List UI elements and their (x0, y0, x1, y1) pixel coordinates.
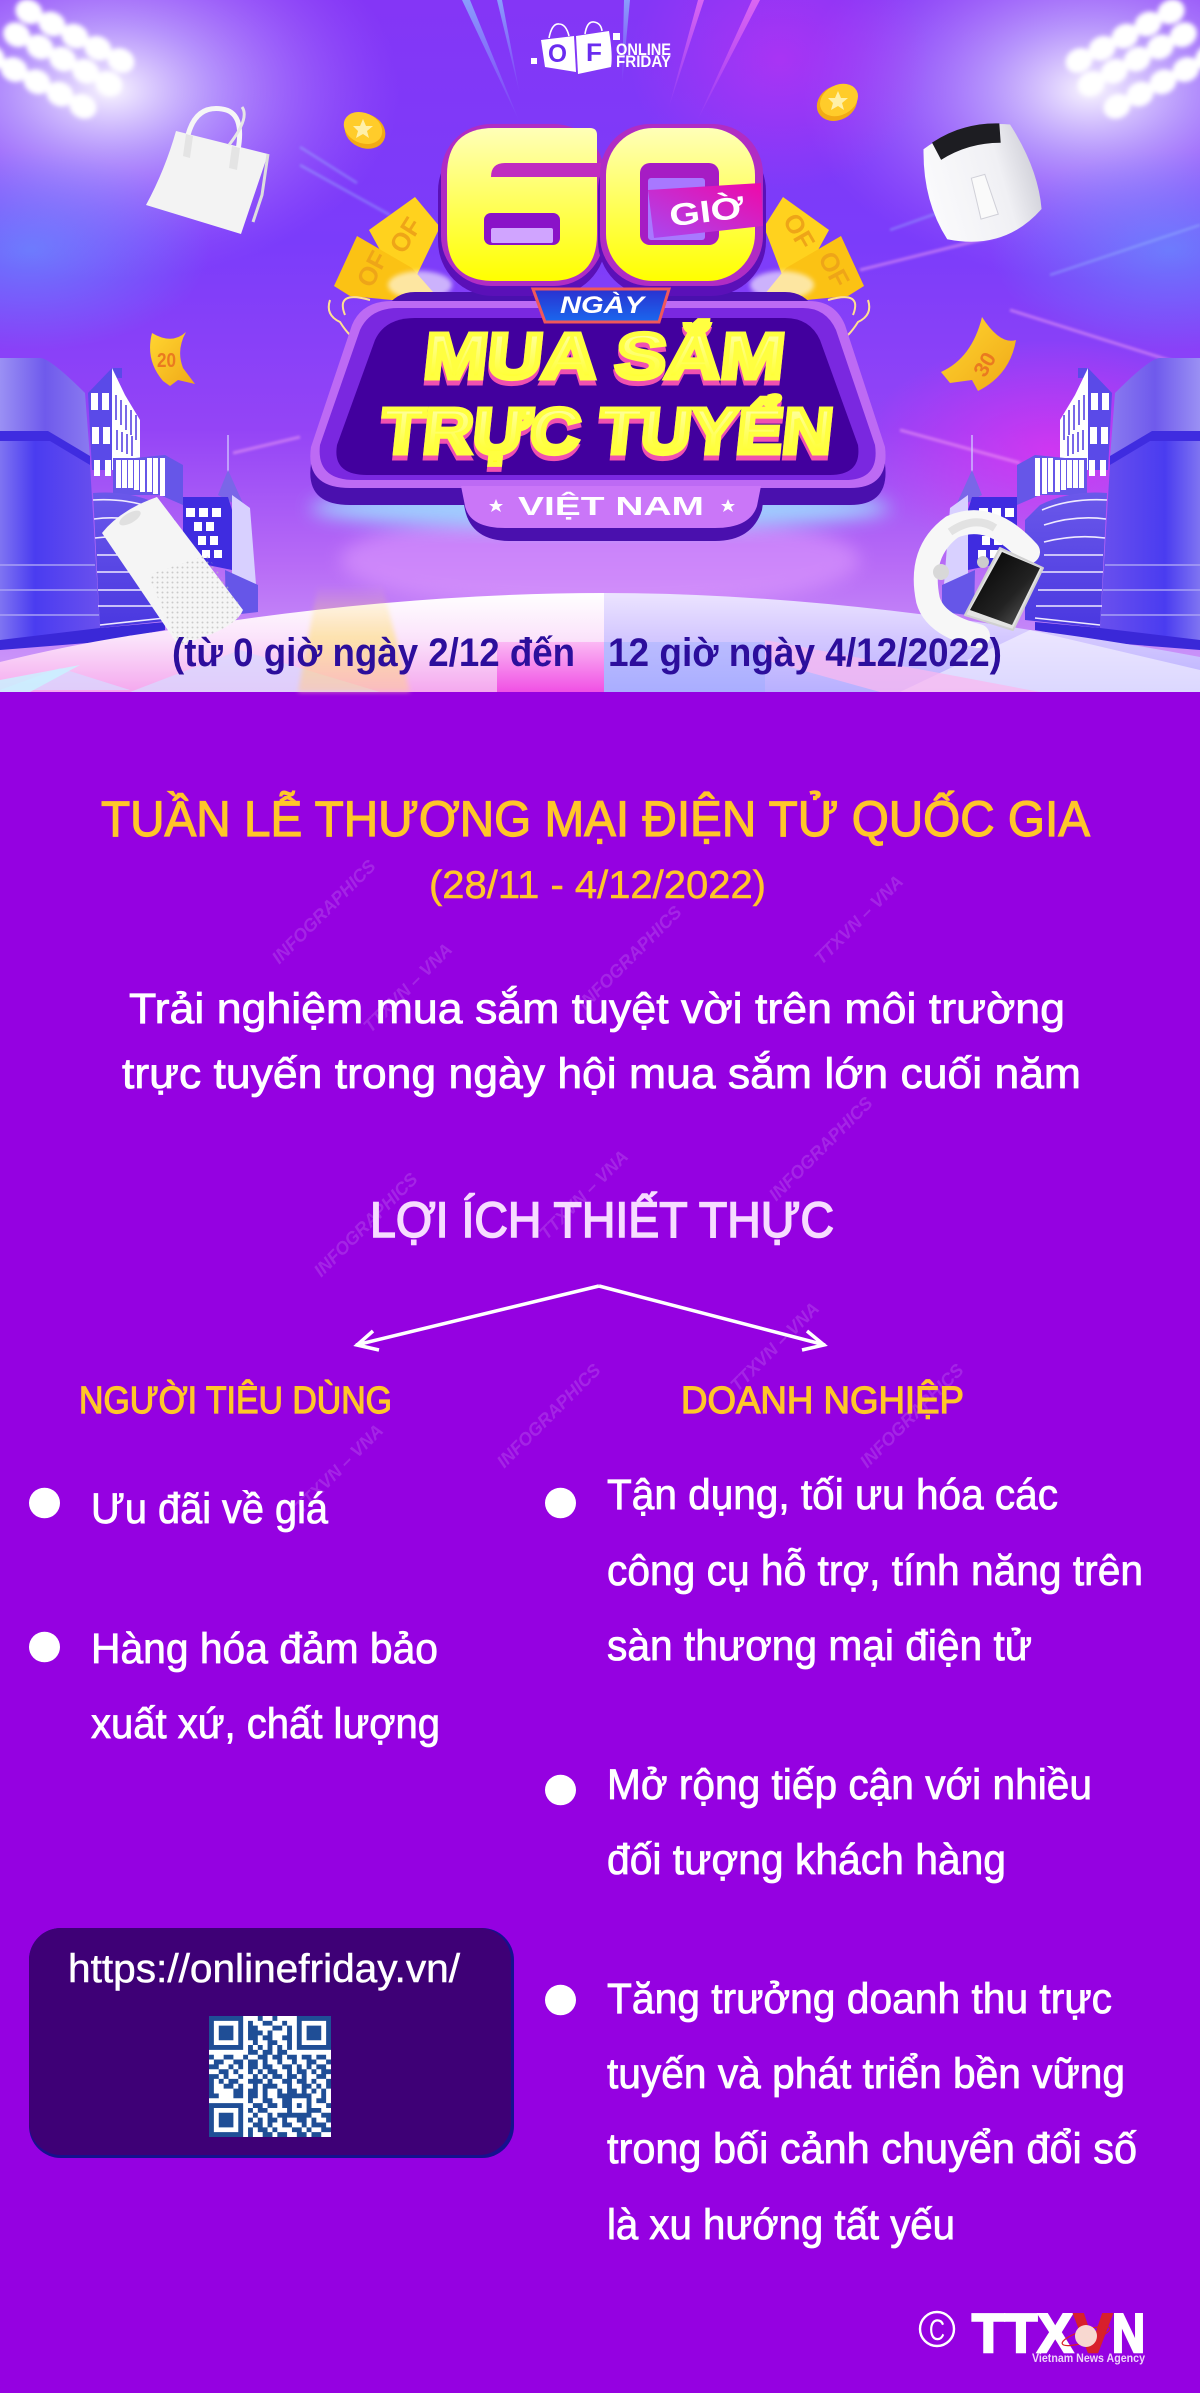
bullet: reach (545, 1761, 1092, 1884)
title: e-commerce week: TUẦN LỄ THƯƠNG MẠI ĐIỆN TỬ QUỐC GIA (101, 790, 1091, 847)
icon: smart watch (926, 522, 1043, 636)
bullet: origin and quality (29, 1625, 440, 1748)
website address: https://onlinefriday.vn/ (68, 1947, 461, 1991)
watermark: INFOGRAPHICS (856, 1360, 968, 1472)
tag: ngày: NGÀY (560, 291, 646, 319)
vouchers right of the number: OF (812, 246, 856, 292)
wordmark: N (1112, 2302, 1145, 2364)
bullet: growth: Tăng trưởng doanh thu trực (607, 1975, 1112, 2023)
intro text: Trải nghiệm mua sắm tuyệt vời trên môi trường (129, 985, 1065, 1033)
icon: gold coin right (810, 77, 864, 128)
bullet: growth: trong bối cảnh chuyển đổi số (607, 2125, 1137, 2173)
big number 60 (438, 124, 766, 296)
icon: small voucher 20 (150, 332, 195, 386)
watermark: INFOGRAPHICS (574, 902, 686, 1014)
agency name: Vietnam News Agency (1032, 2351, 1145, 2365)
vouchers left of the number: OF (383, 212, 428, 258)
intro text (122, 985, 1081, 1098)
arrows (356, 1286, 825, 1350)
logo: TTXVN (920, 2302, 1145, 2365)
vouchers left of the number (329, 197, 452, 335)
card: website and QR (29, 1928, 514, 2158)
watermark: TTXVN – VNA (359, 939, 456, 1036)
watermark (268, 856, 968, 1517)
bullet: tools: công cụ hỗ trợ, tính năng trên (607, 1547, 1143, 1595)
date range text: (từ 0 giờ ngày 2/12 đến (172, 631, 575, 675)
icon: white handbag (146, 107, 268, 234)
city buildings left (0, 358, 258, 650)
stage floor (0, 585, 1200, 692)
vouchers right of the number: OF (777, 208, 821, 254)
column: consumers (29, 1379, 440, 1748)
bullet: tools: Tận dụng, tối ưu hóa các (607, 1471, 1058, 1519)
flag: giờ (648, 183, 763, 238)
watermark: INFOGRAPHICS (493, 1360, 605, 1472)
column: businesses (545, 1379, 1143, 2249)
wordmark: TTX (972, 2302, 1073, 2364)
heading: businesses: DOANH NGHIỆP (681, 1379, 964, 1422)
copyright mark (920, 2312, 954, 2347)
stadium lights right (1061, 0, 1200, 129)
digit 0 (598, 124, 766, 296)
logo: Online Friday (531, 22, 672, 74)
icon: small voucher 20: 20 (157, 350, 176, 372)
main plate (310, 292, 890, 541)
watermark: TTXVN – VNA (810, 871, 907, 968)
bullet: tools: sàn thương mại điện tử (607, 1622, 1032, 1670)
bullet: growth: là xu hướng tất yếu (607, 2201, 955, 2249)
date range text: 12 giờ ngày 4/12/2022) (608, 631, 1002, 675)
stadium lights left (0, 0, 139, 129)
bullet: price: Ưu đãi về giá (91, 1485, 328, 1533)
title: e-commerce week (101, 790, 1091, 907)
watermark: INFOGRAPHICS (765, 1093, 877, 1205)
intro text: trực tuyến trong ngày hội mua sắm lớn cuối năm (122, 1050, 1081, 1098)
icon: white air fryer (913, 113, 1049, 253)
logo: Online Friday: F (586, 39, 602, 67)
QR code (209, 2016, 331, 2137)
watermark: INFOGRAPHICS (310, 1169, 422, 1281)
tag: ngày (533, 289, 669, 322)
watermark: TTXVN – VNA (290, 1420, 387, 1517)
date range text (172, 631, 1002, 675)
headline: Mua sắm trực tuyến: TRỰC TUYỂN (378, 394, 837, 467)
wordmark (972, 2302, 1145, 2364)
headline: Mua sắm trực tuyến: TRỰC TUYỂN (377, 399, 836, 472)
icon: small voucher 30: 30 (969, 349, 1001, 381)
headline: Mua sắm trực tuyến (377, 319, 837, 472)
globe emblem (1060, 2323, 1112, 2349)
heading: consumers: NGƯỜI TIÊU DÙNG (79, 1379, 392, 1422)
logo: Online Friday: O (548, 40, 567, 68)
banner: 60 hours of online shopping (0, 0, 1200, 692)
pill: Việt Nam: VIỆT NAM (518, 491, 704, 521)
icon: gold coin left (339, 106, 391, 155)
logo: Online Friday: ONLINE (616, 40, 671, 59)
headline: Mua sắm trực tuyến: MUA SẮM (421, 319, 788, 392)
vouchers left of the number: OF (350, 246, 394, 292)
bullet: growth (545, 1975, 1137, 2249)
logo: Online Friday: FRIDAY (616, 52, 672, 71)
pill: Việt Nam (461, 486, 765, 541)
wordmark: V (1074, 2302, 1112, 2364)
icon: small voucher 30 (941, 317, 1016, 391)
watermark: INFOGRAPHICS (268, 856, 380, 968)
flag: giờ: GIỜ (667, 188, 747, 233)
date of the week: (28/11 - 4/12/2022) (429, 864, 766, 907)
headline: Mua sắm trực tuyến: MUA SẮM (420, 324, 788, 397)
heading: practical benefits: LỢI ÍCH THIẾT THỰC (370, 1192, 834, 1248)
watermark: TTXVN – VNA (726, 1298, 823, 1395)
banner background (0, 0, 1200, 692)
bullet: reach: đối tượng khách hàng (607, 1836, 1006, 1884)
bullet: origin and quality: xuất xứ, chất lượng (91, 1700, 440, 1748)
bullet: growth: tuyến và phát triển bền vững (607, 2050, 1125, 2098)
vouchers right of the number (750, 197, 869, 335)
watermark: TTXVN – VNA (535, 1146, 632, 1243)
bullet: origin and quality: Hàng hóa đảm bảo (91, 1625, 438, 1673)
city buildings right (942, 358, 1200, 650)
bullet: reach: Mở rộng tiếp cận với nhiều (607, 1761, 1092, 1809)
digit 6 (438, 124, 606, 296)
icon: air purifier (102, 497, 243, 645)
copyright mark: C (929, 2314, 945, 2347)
bullet: tools (545, 1471, 1143, 1670)
